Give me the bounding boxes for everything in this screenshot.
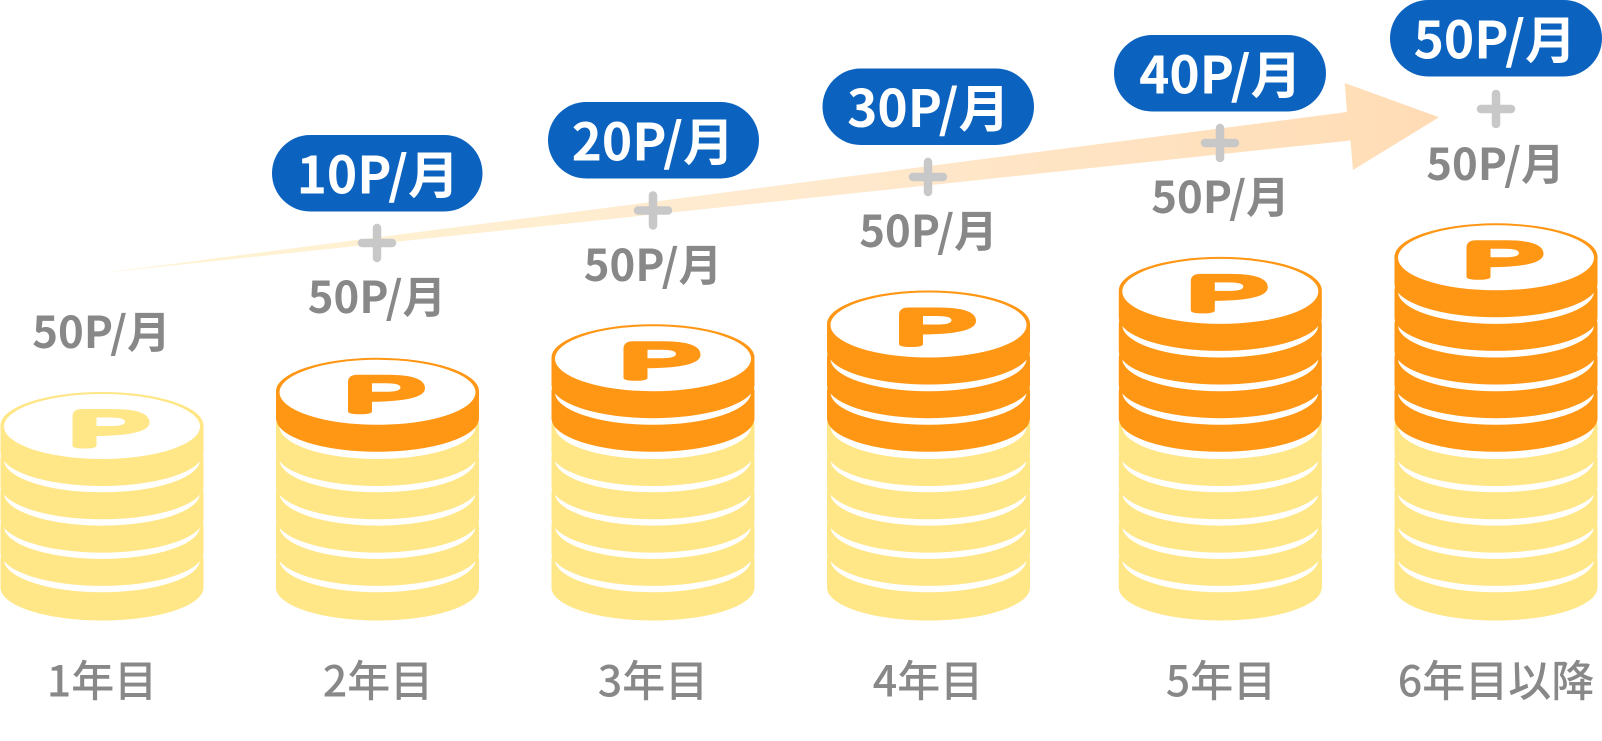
panel: year 6 and later column [1390, 0, 1602, 710]
text: year 6 base points: 50P/月 [1426, 129, 1565, 193]
text: year 3 label: 3年目 [598, 648, 708, 710]
icon: year 5 plus [1205, 128, 1235, 158]
icon: year 3 coin stack [552, 324, 754, 620]
icon: year 6 plus [1481, 94, 1511, 124]
callout: year 2 bonus points: 10P/月 [297, 134, 459, 208]
text: year 3 base points: 50P/月 [584, 230, 722, 294]
callout: year 3 bonus points: 20P/月 [572, 100, 734, 176]
icon: year 2 coin stack [276, 358, 479, 620]
text: year 5 label: 5年目 [1166, 648, 1276, 710]
panel: year 3 column [548, 100, 759, 710]
panel: year 5 column [1114, 34, 1326, 710]
callout: year 5 bonus points: 40P/月 [1139, 34, 1302, 108]
text: year 5 base points: 50P/月 [1151, 162, 1290, 226]
icon: year 4 plus [913, 162, 943, 192]
icon: year 1 coin stack [0, 392, 204, 620]
icon: year 4 coin stack [827, 290, 1030, 620]
icon: year 5 coin stack [1119, 257, 1322, 620]
text: year 2 base points: 50P/月 [308, 262, 446, 326]
icon: year 3 plus [638, 196, 668, 226]
callout: year 4 bonus points: 30P/月 [847, 67, 1010, 142]
text: year 4 base points: 50P/月 [859, 196, 998, 260]
text: year 1 base points: 50P/月 [32, 297, 171, 361]
text: year 2 label: 2年目 [323, 648, 433, 710]
panel: year 1 column [0, 297, 204, 710]
panel: year 4 column [822, 67, 1034, 710]
text: year 6 label: 6年目以降 [1398, 648, 1594, 710]
text: year 4 label: 4年目 [873, 648, 983, 710]
text: year 1 label: 1年目 [47, 648, 157, 710]
icon: year 6 coin stack [1394, 223, 1598, 620]
panel: year 2 column [272, 134, 482, 710]
arrow: growth gradient [102, 83, 1439, 273]
icon: year 2 plus [362, 228, 392, 258]
callout: year 6 bonus points: 50P/月 [1414, 0, 1576, 74]
